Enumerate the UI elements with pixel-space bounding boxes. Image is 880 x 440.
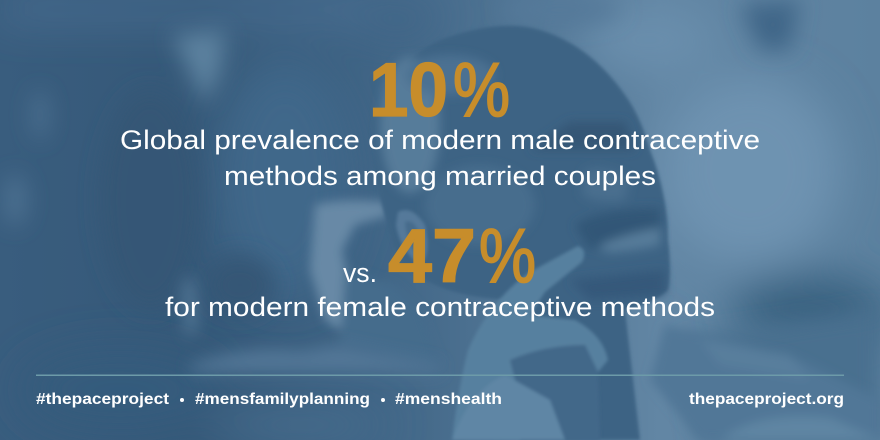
statistic: 10% [369, 48, 510, 133]
text: male contraceptive description: methods among married couples [224, 161, 656, 191]
figure: ear [396, 210, 428, 265]
text: male contraceptive description: Global prevalence of modern male contraceptive [120, 125, 760, 155]
figure: main man's head [372, 26, 670, 440]
statistic: 47%: % [479, 214, 536, 299]
statistic: 47% [388, 214, 536, 299]
footer: hashtags: #menshealth [395, 391, 502, 408]
figure: shirt collar [650, 325, 880, 440]
footer: hashtags: #mensfamilyplanning [195, 391, 370, 408]
text: male contraceptive description [120, 125, 760, 191]
figure: hand of man in background [306, 196, 385, 340]
statistic: 10%: % [453, 48, 510, 133]
text: female contraceptive description: for modern female contraceptive methods [165, 292, 715, 322]
figure: hand on chin [452, 246, 608, 440]
footer: hashtags [36, 391, 502, 408]
text: vs.: vs. [343, 258, 377, 288]
footer: hashtags: #thepaceproject [36, 391, 170, 408]
footer: website: thepaceproject.org [689, 391, 844, 408]
statistic: 10%: 10 [369, 48, 448, 133]
statistic: 47%: 47 [388, 214, 476, 299]
